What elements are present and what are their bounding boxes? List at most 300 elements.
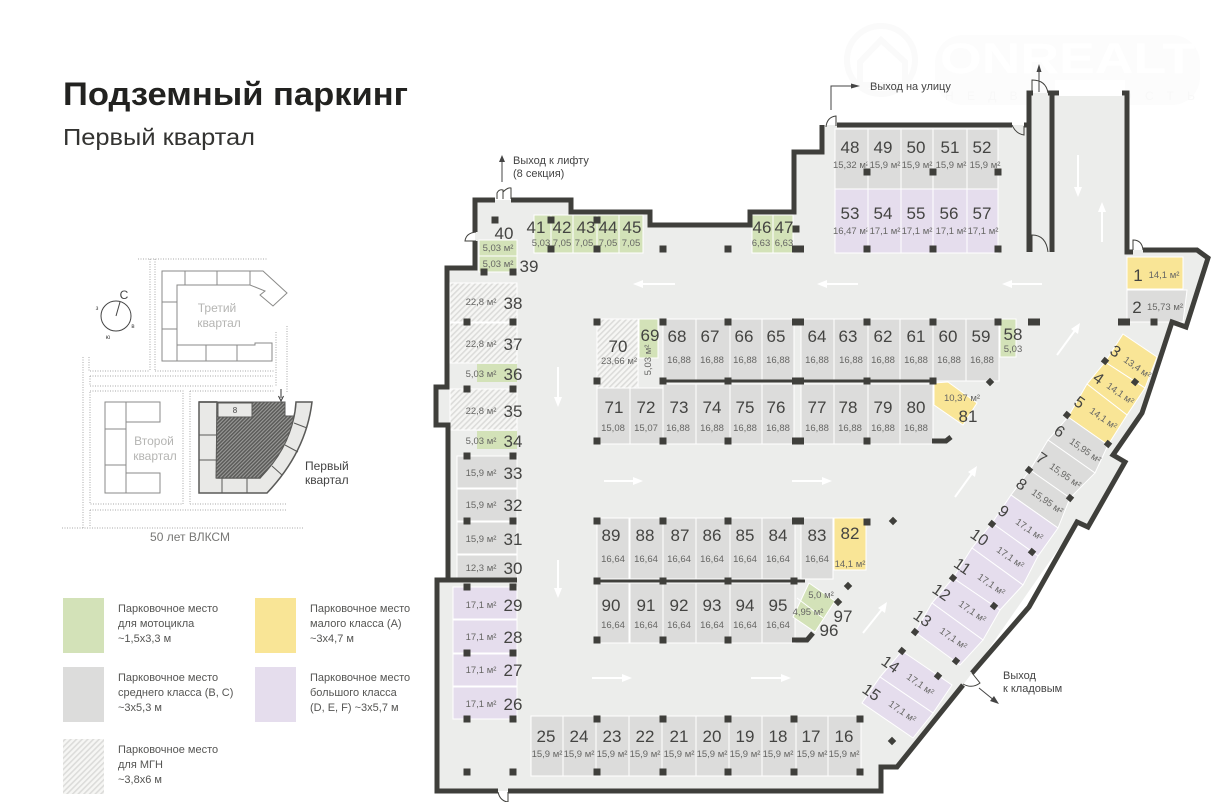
- spot 21: 15,9 м²: [664, 749, 694, 760]
- spot 51: 51: [941, 138, 959, 157]
- spot 37: 37: [504, 335, 522, 354]
- spot 89: [597, 518, 629, 579]
- spot 7: 15,95 м²: [1047, 461, 1083, 491]
- legend: large class: большого класса: [310, 687, 398, 699]
- spot 58: 58: [1004, 325, 1022, 344]
- spot 25: 25: [537, 727, 555, 746]
- spot 8: [1011, 470, 1070, 528]
- spot 57: 17,1 м²: [968, 226, 998, 237]
- exit to storage label: [979, 670, 1062, 704]
- spot 41: 41: [527, 218, 545, 237]
- spot 91: 91: [637, 596, 655, 615]
- spot 84: 84: [769, 526, 787, 545]
- spot 13: [910, 603, 983, 665]
- spot 39: [479, 256, 538, 276]
- spot 80: 16,88: [904, 423, 928, 434]
- spots 96 and 97: 4,95 м²: [793, 607, 823, 618]
- spot 48: 48: [841, 138, 859, 157]
- spot 50: [901, 129, 933, 189]
- spot 95: [762, 583, 795, 643]
- spot 74: 16,88: [700, 423, 724, 434]
- spot 77: [801, 384, 834, 444]
- spot 65: 65: [767, 327, 785, 346]
- spot 47: 6,63: [775, 238, 793, 249]
- spot 2: 15,73 м²: [1147, 302, 1183, 313]
- spot 19: 15,9 м²: [730, 749, 760, 760]
- spot 72: 15,07: [634, 423, 658, 434]
- spot 17: 17: [802, 727, 820, 746]
- spot 62: [868, 319, 900, 381]
- spot 5: 14,1 м²: [1087, 406, 1119, 432]
- spot 77: 77: [808, 398, 826, 417]
- spot 67: 16,88: [700, 355, 724, 366]
- spot 36: 5,03 м²: [466, 369, 496, 380]
- spot 92: 16,64: [667, 620, 691, 631]
- spot 63: [834, 319, 868, 381]
- watermark: НЕДВИЖИМОСТЬ: [945, 89, 1195, 103]
- spot 89: 89: [602, 526, 620, 545]
- spot 23: [596, 716, 629, 776]
- ramp top fade: [1055, 80, 1125, 96]
- street label: 50 лет ВЛКСМ: [150, 530, 230, 544]
- spot 21: 21: [670, 727, 688, 746]
- arrow west: [1002, 280, 1042, 288]
- legend: small class: малого класса (А): [310, 618, 402, 630]
- spot 17: 15,9 м²: [797, 749, 827, 760]
- spot 80: 80: [907, 398, 925, 417]
- spot 65: [762, 319, 794, 381]
- spot 39: 5,03 м²: [483, 259, 513, 270]
- spot 33: 15,9 м²: [466, 468, 496, 479]
- block 48-57: [833, 129, 1000, 253]
- spot 30: 12,3 м²: [466, 563, 496, 574]
- spot 68: 16,88: [667, 355, 691, 366]
- spot 44: 7,05: [599, 238, 617, 249]
- spot 67: [696, 319, 730, 381]
- spot 37: 22,8 м²: [466, 339, 496, 350]
- spot 9: 9: [994, 502, 1012, 522]
- arrow south: [554, 560, 562, 598]
- spot 93: 93: [703, 596, 721, 615]
- spot 66: [730, 319, 762, 381]
- arrow to parking entrance: [278, 389, 284, 401]
- spot 53: [833, 189, 869, 253]
- spot 66: 16,88: [733, 355, 757, 366]
- spot 3: 13,4 м²: [1121, 355, 1153, 381]
- spot 5: [1068, 384, 1127, 445]
- spot 68: 68: [668, 327, 686, 346]
- spot 42: 42: [553, 218, 571, 237]
- spot 48: 15,32 м²: [833, 160, 869, 171]
- spot 6: 6: [1050, 422, 1068, 442]
- arrow west: [817, 280, 858, 288]
- spot 38: [450, 283, 522, 322]
- legend: motorcycle: для мотоцикла: [118, 618, 195, 630]
- spot 46: 6,63: [752, 238, 770, 249]
- spot 13: 13: [910, 607, 934, 631]
- bottom row spots: [531, 716, 861, 776]
- spot 83: 83: [808, 526, 826, 545]
- spot 14: [878, 651, 952, 713]
- spot 90: 16,64: [601, 620, 625, 631]
- spot 14: 17,1 м²: [904, 672, 936, 698]
- spot 88: [630, 518, 663, 579]
- spot 58: [1000, 319, 1022, 357]
- spot 22: [629, 716, 662, 776]
- spot 6: [1048, 417, 1108, 473]
- spot 35: 22,8 м²: [466, 406, 496, 417]
- pillars: [464, 168, 1158, 776]
- spot 18: [762, 716, 796, 776]
- spot 15: 17,1 м²: [886, 699, 918, 725]
- spot 44: [597, 215, 619, 253]
- spot 1: 1: [1133, 266, 1143, 285]
- spot 49: 15,9 м²: [870, 160, 900, 171]
- spot 79: 79: [874, 398, 892, 417]
- spot 88: 16,64: [634, 554, 658, 565]
- legend: motorcycle: Парковочное место: [118, 603, 218, 615]
- spot 78: 16,88: [838, 423, 862, 434]
- spot 33: [457, 456, 522, 488]
- spot 26: [453, 687, 522, 719]
- spot 76: 16,88: [766, 423, 790, 434]
- spot 22: 22: [636, 727, 654, 746]
- spot 65: 16,88: [766, 355, 790, 366]
- floor: [436, 93, 1208, 791]
- left column spots: [450, 224, 538, 719]
- spot 49: [868, 129, 901, 189]
- spot 13: 17,1 м²: [937, 626, 969, 652]
- spot 52: 15,9 м²: [970, 160, 1000, 171]
- spot 40: [479, 224, 517, 256]
- first quarter label: Первый: [305, 459, 349, 473]
- spot 70: 70: [609, 337, 627, 356]
- spot 24: 15,9 м²: [564, 749, 594, 760]
- spot 51: [933, 129, 967, 189]
- spot 15: [859, 677, 933, 738]
- legend: large class: Парковочное место: [310, 672, 410, 684]
- spot 28: 28: [504, 628, 522, 647]
- spot 62: 62: [874, 327, 892, 346]
- legend: medium class: ~3х5,3 м: [118, 702, 162, 714]
- spot 36: [466, 364, 522, 384]
- spot 45: 7,05: [622, 238, 640, 249]
- spot 59: 16,88: [970, 355, 994, 366]
- spots 96 and 97: 5,0 м²: [808, 590, 834, 601]
- spot 55: 17,1 м²: [902, 226, 932, 237]
- spot 9: [992, 495, 1058, 556]
- spot 73: 73: [670, 398, 688, 417]
- spot 16: 15,9 м²: [829, 749, 859, 760]
- spot 19: 19: [736, 727, 754, 746]
- spot 27: 27: [504, 661, 522, 680]
- traffic arrows: [554, 155, 1106, 682]
- spot 50: 15,9 м²: [902, 160, 932, 171]
- spot 59: [966, 319, 999, 381]
- spot 28: [453, 620, 522, 653]
- diagonal spots: [859, 334, 1157, 738]
- doors: [465, 80, 1143, 802]
- subtitle: Первый квартал: [63, 124, 255, 150]
- spot 3: 3: [1106, 342, 1124, 362]
- spot 16: [828, 716, 861, 776]
- arrow east: [604, 477, 643, 485]
- spot 2: [1127, 290, 1187, 322]
- compass: С: [120, 288, 129, 302]
- spot 61: [900, 319, 933, 381]
- spot 8: 8: [1012, 475, 1030, 495]
- spot 70: [597, 319, 638, 388]
- exit to storage label: Выход: [1003, 670, 1036, 682]
- spot 79: [868, 384, 900, 444]
- spot 87: [663, 518, 696, 579]
- spot 40: 40: [495, 224, 513, 243]
- arrow east: [751, 674, 791, 682]
- spot 86: [696, 518, 730, 579]
- spot 94: 16,64: [733, 620, 757, 631]
- third quarter building: [162, 271, 287, 361]
- spot 93: [696, 583, 730, 643]
- spot 2: 2: [1132, 298, 1142, 317]
- spot 64: [801, 319, 834, 381]
- spot 21: [662, 716, 696, 776]
- spot 66: 66: [735, 327, 753, 346]
- arrow east: [592, 674, 632, 682]
- spot 63: 63: [839, 327, 857, 346]
- arrow north-east: [1057, 323, 1080, 355]
- spot 10: 10: [967, 526, 991, 550]
- second quarter building: Второй: [134, 434, 174, 448]
- spot 12: [929, 578, 1000, 640]
- spot 40: 5,03 м²: [483, 243, 513, 254]
- spot 10: [967, 523, 1038, 585]
- spot 7: [1030, 440, 1095, 498]
- watermark: ONREALT: [940, 35, 1195, 83]
- site map: [62, 259, 349, 544]
- spot 67: 67: [701, 327, 719, 346]
- spot 27: [453, 654, 522, 686]
- spot 81: 81: [959, 407, 977, 426]
- spot 29: [453, 587, 522, 619]
- spot 54: [868, 189, 901, 253]
- spot 61: 16,88: [904, 355, 928, 366]
- spot 29: 29: [504, 596, 522, 615]
- spot 34: 34: [504, 432, 522, 451]
- spot 28: 17,1 м²: [466, 632, 496, 643]
- exit to street label: [831, 81, 951, 110]
- spot 54: 54: [874, 204, 892, 223]
- spot 18: 18: [769, 727, 787, 746]
- spot 63: 16,88: [839, 355, 863, 366]
- spot 12: 17,1 м²: [956, 599, 988, 625]
- spot 87: 16,64: [667, 554, 691, 565]
- first quarter building: [199, 402, 312, 493]
- spot 35: [450, 389, 522, 430]
- spot 38: 22,8 м²: [466, 297, 496, 308]
- legend: medium class: среднего класса (В, С): [118, 687, 233, 699]
- compass: в: [131, 324, 135, 330]
- spots 96 and 97: 96: [820, 621, 838, 640]
- arrow west: [633, 280, 675, 288]
- spot 35: 35: [504, 402, 522, 421]
- spot 42: 7,05: [553, 238, 571, 249]
- spot 92: 92: [670, 596, 688, 615]
- spot 1: 14,1 м²: [1149, 270, 1179, 281]
- spot 20: [696, 716, 729, 776]
- spot 41: [527, 215, 551, 253]
- legend: disabled: [63, 739, 218, 794]
- spot 88: 88: [636, 526, 654, 545]
- exit to street label: Выход на улицу: [870, 81, 951, 93]
- spot 55: 55: [907, 204, 925, 223]
- spot 5: 5: [1070, 393, 1088, 413]
- central upper block: [597, 319, 1022, 444]
- spot 85: [730, 518, 762, 579]
- spot 47: 47: [775, 218, 793, 237]
- second quarter building: квартал: [133, 449, 177, 463]
- spot 85: 85: [736, 526, 754, 545]
- spot 74: [696, 384, 730, 444]
- spot 84: 16,64: [766, 554, 790, 565]
- spot 4: 4: [1089, 369, 1107, 389]
- spot 72: [630, 388, 663, 444]
- spot 76: [762, 384, 794, 444]
- spot 74: 74: [703, 398, 721, 417]
- watermark: [847, 26, 1200, 105]
- legend: medium class: [63, 667, 233, 722]
- legend: motorcycle: ~1,5х3,3 м: [118, 633, 171, 645]
- spot 11: 11: [950, 555, 974, 579]
- spot 61: 61: [907, 327, 925, 346]
- spot 29: 17,1 м²: [466, 600, 496, 611]
- spot 70: 23,66 м²: [601, 356, 637, 367]
- spot 43: [573, 215, 597, 253]
- third quarter building: Третий: [198, 301, 236, 315]
- spot 56: [933, 189, 967, 253]
- spot 4: 14,1 м²: [1104, 381, 1136, 407]
- exit to lift label: (8 секция): [513, 168, 564, 180]
- spot 94: [730, 583, 762, 643]
- spots 96 and 97: [793, 583, 852, 640]
- legend: [63, 598, 410, 794]
- spot 53: 53: [841, 204, 859, 223]
- spot 83: [801, 518, 833, 579]
- spot 16: 16: [835, 727, 853, 746]
- spot 41: 5,03: [532, 238, 550, 249]
- spot 47: [773, 215, 793, 253]
- spot 6: 15,95 м²: [1067, 436, 1103, 466]
- spot 91: 16,64: [634, 620, 658, 631]
- spot 91: [630, 583, 663, 643]
- spots 96 and 97: 97: [834, 607, 852, 626]
- spot 30: 30: [504, 559, 522, 578]
- spot 83: 16,64: [805, 554, 829, 565]
- spot 75: [730, 384, 762, 444]
- spot 34: 5,03 м²: [466, 436, 496, 447]
- spot 31: 31: [504, 530, 522, 549]
- spot 45: [619, 215, 643, 253]
- spot 3: [1105, 334, 1157, 388]
- spot 43: 7,05: [575, 238, 593, 249]
- spot 57: [967, 189, 998, 253]
- spot 82: 82: [841, 524, 859, 543]
- spot 59: 59: [972, 327, 990, 346]
- spot 10: 17,1 м²: [994, 545, 1026, 571]
- spot 71: 71: [605, 398, 623, 417]
- spot 90: [597, 583, 629, 643]
- arrow north-east: [863, 602, 887, 633]
- spot 45: 45: [623, 218, 641, 237]
- spot 25: 15,9 м²: [532, 749, 562, 760]
- compass: ю: [106, 335, 111, 341]
- title: Подземный паркинг: [63, 76, 408, 112]
- spot 39: 39: [520, 257, 538, 276]
- spot 60: 60: [939, 327, 957, 346]
- third quarter building: квартал: [197, 316, 241, 330]
- central lower block: [597, 518, 866, 643]
- spot 85: 16,64: [733, 554, 757, 565]
- spot 58: 5,03: [1004, 344, 1022, 355]
- spot 69: 5,03 м²: [643, 345, 654, 375]
- spot 79: 16,88: [871, 423, 895, 434]
- spot 18: 15,9 м²: [763, 749, 793, 760]
- spot 25: [531, 716, 563, 776]
- spot 8: 15,95 м²: [1029, 487, 1065, 517]
- first quarter building: 8: [233, 406, 238, 415]
- spot 26: 17,1 м²: [466, 699, 496, 710]
- spot 89: 16,64: [601, 554, 625, 565]
- spot 90: 90: [602, 596, 620, 615]
- spot 92: [663, 583, 696, 643]
- spot 81: 10,37 м²: [944, 393, 980, 404]
- spot 50: 50: [907, 138, 925, 157]
- spot 78: [834, 384, 868, 444]
- spot 14: 14: [878, 653, 902, 677]
- legend: motorcycle: [63, 598, 218, 653]
- spot 75: 16,88: [733, 423, 757, 434]
- spot 33: 33: [504, 464, 522, 483]
- roads: [62, 259, 303, 528]
- spot 20: 20: [703, 727, 721, 746]
- spot 31: 15,9 м²: [466, 534, 496, 545]
- spot 49: 49: [874, 138, 892, 157]
- arrow south ramp: [1074, 155, 1082, 197]
- spot 80: [900, 384, 933, 444]
- legend: large class: [255, 667, 410, 722]
- spot 11: 17,1 м²: [975, 572, 1007, 598]
- spot 46: 46: [753, 218, 771, 237]
- arrow south: [554, 367, 562, 407]
- exit to lift label: Выход к лифту: [513, 155, 589, 167]
- first quarter label: квартал: [305, 473, 349, 487]
- spot 19: [729, 716, 762, 776]
- spot 23: 23: [603, 727, 621, 746]
- spot 75: 75: [736, 398, 754, 417]
- street exit arrow up: [1036, 64, 1042, 92]
- arrow north ramp: [1098, 202, 1106, 242]
- spot 81: [934, 382, 980, 426]
- spot 32: [457, 489, 522, 521]
- spot 68: [663, 319, 696, 381]
- legend: small class: Парковочное место: [310, 603, 410, 615]
- spot 69: 69: [641, 326, 659, 345]
- spot 7: 7: [1032, 449, 1050, 469]
- spot 1: [1127, 257, 1183, 289]
- legend: disabled: Парковочное место: [118, 744, 218, 756]
- spot 94: 94: [736, 596, 754, 615]
- spot 71: 15,08: [601, 423, 625, 434]
- interior walls: [597, 381, 951, 640]
